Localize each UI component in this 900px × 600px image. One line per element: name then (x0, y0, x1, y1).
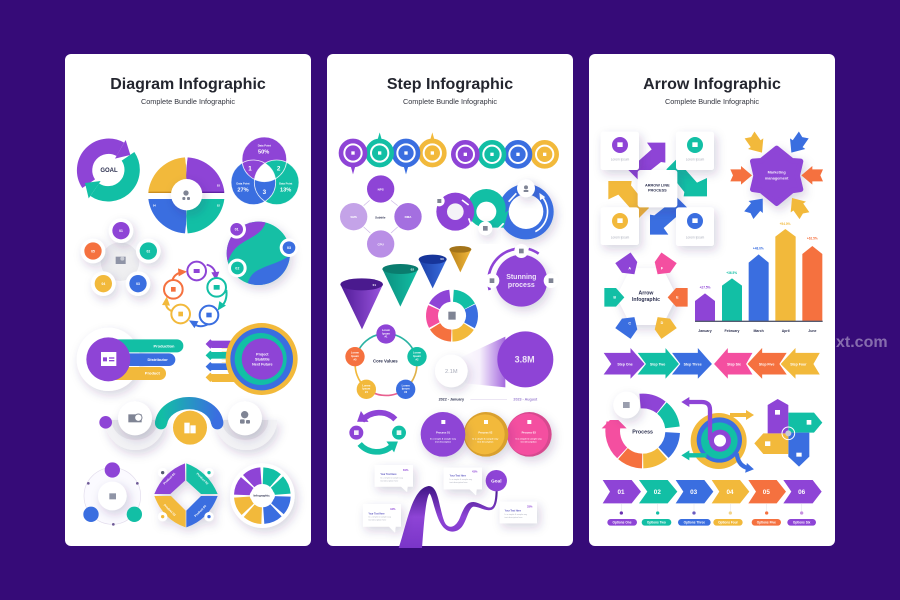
venn diagram: 2 (277, 165, 281, 172)
four bubble diagram: NPS (378, 187, 384, 191)
bar chart: April (782, 329, 790, 333)
marketing star with arrows: management (765, 176, 789, 180)
speech card one (375, 465, 413, 492)
speech card two: text description here (450, 481, 468, 484)
three interlocking rings (434, 179, 554, 239)
step arrows row: Step Five (759, 362, 774, 366)
three overlapping circles: text description (435, 440, 452, 443)
heading: step infographic: Step Infographic (387, 76, 513, 93)
linked rings row one (341, 132, 444, 174)
heading: arrow infographic: Arrow Infographic (643, 76, 781, 93)
four bubble diagram (340, 175, 422, 258)
step arrows row: Step Four (790, 362, 807, 366)
core values ring: Ipsum (402, 387, 410, 391)
four bubble diagram: Subtitle (375, 215, 386, 219)
bar chart: +54.0% (780, 222, 791, 226)
venn diagram: 27% (237, 188, 249, 194)
core values ring: #4 (365, 390, 368, 394)
speech card two: In a simple & sample way (450, 479, 472, 481)
core values ring: Ipsum (362, 387, 371, 391)
option pills: Options Five (757, 521, 776, 525)
panel 3 upper diagrams (601, 130, 823, 339)
numbered chevrons: 06 (798, 489, 806, 496)
venn diagram: 13% (280, 188, 291, 194)
process segmented ring: Process (632, 430, 653, 436)
bar chart: March (754, 329, 764, 333)
venn diagram: 3 (263, 189, 267, 196)
core values ring: Ipsum (351, 354, 360, 358)
three overlapping circles: Process 03 (522, 430, 536, 434)
eight segment wheel: Infographic (254, 494, 270, 498)
numbered chevrons: 05 (763, 489, 770, 496)
step arrows row: Step One (617, 362, 633, 366)
venn diagram: 1 (248, 165, 252, 172)
core values ring: Lorem (402, 383, 410, 387)
diamond four sections: Product 03 (163, 503, 177, 517)
funnel cones: 01 (373, 283, 376, 287)
heading: diagram infographic: Diagram Infographic (110, 76, 266, 93)
three overlapping circles: text description (521, 440, 537, 443)
pill list card: Distributor (147, 357, 168, 362)
speech card four: In a simple & sample way (505, 514, 527, 516)
arrow line process: ARROW LINE (645, 184, 670, 188)
three overlapping circles: Process 02 (478, 430, 493, 434)
arrow line process (601, 132, 714, 246)
speech card four: Your Text Here (505, 510, 522, 513)
three overlapping circles: In a simple & sample way (472, 438, 499, 440)
three overlapping circles: Process 01 (436, 430, 451, 434)
marketing star with arrows (730, 130, 823, 221)
subheading: Complete Bundle Infographic (141, 97, 235, 106)
speech card two: Your Text Here (450, 475, 467, 478)
diamond four sections (154, 463, 218, 527)
five node pentagon diagram: 02 (146, 249, 150, 253)
three overlapping circles: In a simple & sample way (430, 438, 457, 440)
panel 1 lower diagrams (77, 323, 298, 528)
arrow infographic hexagon: Infographic (632, 297, 660, 303)
speech card two (444, 468, 482, 495)
bar chart: +48.0% (753, 247, 764, 251)
option pills (607, 504, 816, 526)
marketing star with arrows: Marketing (768, 171, 786, 175)
three overlapping circles: In a simple & sample way (516, 438, 542, 440)
bar chart: February (725, 329, 740, 333)
arrow infographic hexagon: E (676, 296, 679, 300)
arrow infographic hexagon (604, 252, 688, 339)
quadrant pie: 03 (217, 184, 220, 188)
process segmented ring (600, 389, 685, 473)
core values ring (345, 324, 427, 399)
step arrows row: Step Six (727, 362, 741, 366)
arrow line process: PROCESS (648, 189, 667, 193)
speech card four (500, 502, 537, 523)
arrow segment ring (424, 288, 480, 343)
pill list card: Product (145, 370, 161, 375)
wave circle: 01 (235, 228, 239, 232)
panel: step infographic (327, 54, 573, 548)
stunning process circle (485, 244, 558, 307)
ribbon path (399, 470, 507, 548)
core values ring: #3 (404, 390, 408, 394)
linked rings row two (453, 142, 557, 166)
speech card one: 81% (403, 468, 409, 472)
arrow infographic hexagon: Arrow (639, 290, 654, 296)
diamond four sections: Product 02 (196, 472, 209, 486)
goal cycle (85, 140, 132, 198)
growth bubble comparison (435, 331, 553, 387)
numbered chevrons: 03 (690, 489, 698, 496)
speech card four: text description here (505, 516, 523, 519)
speech card one: text description here (380, 479, 399, 482)
diamond four sections: Product 04 (193, 504, 207, 518)
core values ring: #5 (354, 357, 357, 361)
three overlapping circles: text description (477, 440, 494, 443)
numbered chevrons (603, 480, 822, 503)
timeline labels: 2023 - August (513, 398, 538, 402)
option pills: Options Six (793, 521, 811, 525)
diamond four sections: Product 01 (162, 472, 176, 485)
option pills: Options Four (718, 521, 739, 525)
five node pentagon diagram: 04 (101, 282, 105, 286)
goal cycle: GOAL (100, 168, 118, 174)
quadrant pie (148, 157, 224, 233)
growth bubble comparison: 3.8M (515, 355, 535, 365)
five node pentagon diagram: 03 (136, 282, 140, 286)
venn diagram: Data Point (258, 144, 271, 148)
numbered chevrons: 04 (726, 489, 734, 496)
five node pentagon diagram (81, 218, 161, 296)
bar chart (695, 222, 823, 333)
panel 2 upper diagrams (340, 132, 558, 343)
core values ring: #1 (385, 335, 388, 339)
core values ring: Ipsum (382, 331, 391, 335)
four bubble diagram: DMA (405, 215, 412, 219)
subheading: Complete Bundle Infographic (403, 97, 497, 106)
subheading: Complete Bundle Infographic (665, 97, 759, 106)
five node pentagon diagram: 01 (119, 229, 123, 233)
four bubble diagram: CPU (378, 242, 384, 246)
panel 2 lower diagrams (345, 324, 553, 548)
two arrow cycle (349, 411, 406, 452)
speech card three (363, 504, 401, 533)
ribbon path: Goal (491, 478, 502, 483)
project concentric rings (206, 323, 298, 395)
venn diagram: Data Point (279, 182, 292, 186)
project concentric rings: Project (256, 352, 269, 356)
numbered chevrons: 01 (617, 489, 625, 496)
core values ring: Core Values (373, 358, 398, 363)
wave circle: 02 (235, 266, 239, 270)
timeline labels: 2022 - January (439, 398, 465, 402)
panel: diagram infographic (65, 54, 311, 546)
arrow infographic hexagon: F (661, 267, 664, 271)
option pills: Options Three (684, 521, 705, 525)
panel: arrow infographic (589, 54, 835, 546)
stunning process circle: process (508, 282, 535, 289)
growth bubble comparison: 2.1M (445, 369, 458, 375)
speech card three: In a simple & sample way (368, 517, 391, 519)
orbit nodes diagram (83, 462, 142, 526)
eight segment wheel (230, 463, 295, 528)
step arrows row: Step Two (650, 362, 665, 366)
arrow line process: Lorem Ipsum (686, 236, 705, 240)
project concentric rings: Next Future (252, 362, 272, 366)
funnel cones: 02 (411, 268, 414, 272)
speech card one: In a simple & sample way (380, 477, 403, 479)
quadrant pie: 02 (217, 204, 220, 208)
speech card one: Your Text Here (380, 473, 397, 476)
numbered chevrons: 02 (654, 489, 661, 496)
step arrows row: Step Three (684, 362, 702, 366)
arrow infographic hexagon: A (628, 267, 631, 271)
panel 1 upper diagrams (81, 137, 299, 328)
five node pentagon diagram: 05 (91, 249, 95, 253)
bar chart: +27.5% (700, 285, 711, 289)
arrow infographic hexagon: D (661, 321, 664, 325)
watermark text: xt.com (836, 334, 888, 351)
quadrant pie: 04 (153, 204, 156, 208)
arrow line process: Lorem Ipsum (686, 158, 705, 162)
funnel cones: 03 (440, 257, 444, 261)
bar chart: June (808, 329, 816, 333)
speech card four: 33% (527, 505, 533, 509)
speech card three: 44% (390, 507, 396, 511)
wave circle (222, 217, 298, 288)
step arrows row (603, 347, 821, 380)
pill list card (77, 328, 183, 391)
four hexagon arrows (754, 399, 822, 467)
arrow infographic hexagon: B (613, 296, 616, 300)
arrow infographic hexagon: C (628, 321, 631, 325)
spiral arrows target (681, 397, 755, 474)
core values ring: Lorem (413, 351, 422, 355)
arrow line process: Lorem Ipsum (611, 236, 630, 240)
bar chart: +36.5% (726, 271, 737, 275)
wave circle: 03 (287, 246, 291, 250)
speech card three: text description here (368, 519, 387, 522)
venn diagram: 50% (258, 150, 269, 156)
funnel cones (340, 246, 471, 329)
speech card two: 43% (472, 470, 478, 474)
project concentric rings: Stubtitle (255, 357, 270, 361)
timeline labels (439, 398, 538, 402)
arrow line process: Lorem Ipsum (611, 158, 630, 162)
icon: chart card (116, 257, 126, 264)
core values ring: Lorem (362, 383, 371, 387)
venn diagram (231, 137, 299, 205)
pill list card: Production (153, 343, 175, 348)
core values ring: Ipsum (413, 354, 422, 358)
core values ring: Lorem (351, 351, 360, 355)
stunning process circle: Stunning (506, 274, 536, 281)
three overlapping circles (421, 412, 552, 457)
panel 3 lower diagrams (600, 347, 822, 526)
core values ring: #2 (416, 357, 419, 361)
core values ring: Lorem (382, 328, 391, 332)
bar chart: +62.5% (807, 237, 818, 241)
option pills: Options Two (647, 521, 666, 525)
option pills: Options One (613, 521, 632, 525)
four bubble diagram: SMS (350, 215, 357, 219)
speech card three: Your Text Here (368, 512, 385, 515)
venn diagram: Data Point (236, 182, 250, 186)
bar chart: January (698, 329, 712, 333)
arch process diagram (99, 401, 277, 450)
circular arrow cycle (162, 262, 227, 328)
